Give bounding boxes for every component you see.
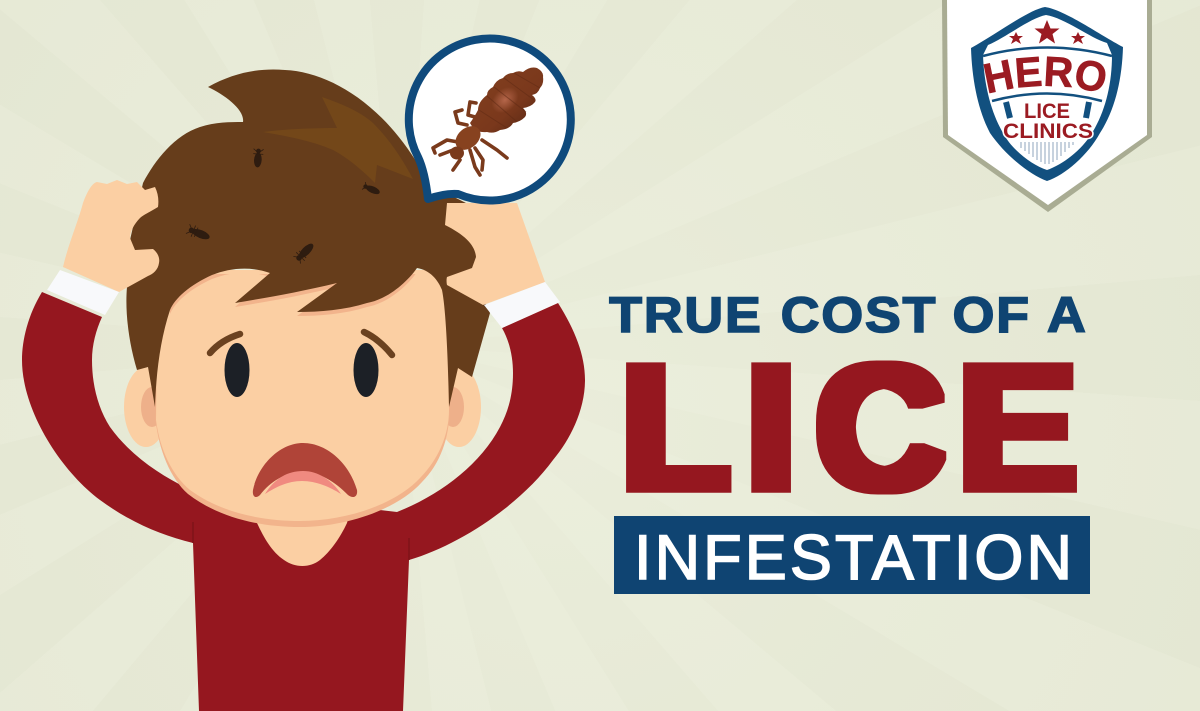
red sweater	[22, 292, 585, 711]
hair	[126, 70, 490, 407]
logo badge	[942, 0, 1152, 212]
infestation banner: INFESTATION	[634, 523, 1072, 593]
hair shadow on forehead	[170, 274, 416, 316]
character: worried boy	[22, 70, 585, 711]
mouth	[253, 443, 357, 497]
heading line: lice: LICE	[621, 328, 1077, 527]
face	[156, 270, 449, 527]
logo wordmark: CLINICS	[1003, 120, 1093, 143]
heading line: true cost of a: A	[1047, 288, 1088, 344]
right cuff	[484, 282, 560, 328]
left eye	[224, 343, 250, 397]
badge plate	[942, 0, 1152, 212]
hair highlight	[263, 97, 413, 183]
left ear	[124, 367, 168, 447]
small lice on hair	[186, 149, 381, 264]
right ear	[437, 367, 481, 447]
shield	[971, 7, 1123, 181]
louse 3	[293, 240, 317, 264]
right eye	[354, 343, 378, 397]
logo wordmark	[984, 56, 1106, 143]
left eyebrow	[210, 334, 240, 353]
louse 2	[186, 223, 211, 243]
logo stripes	[1021, 142, 1073, 164]
heading line: true cost of a: TRUE	[609, 288, 779, 344]
speech bubble with louse	[409, 39, 571, 201]
bubble	[409, 39, 571, 201]
louse 4	[362, 182, 381, 196]
left hand	[63, 180, 159, 292]
stars	[1009, 20, 1085, 44]
right hand	[445, 203, 545, 305]
left cuff	[47, 270, 119, 315]
heading line: true cost of a: OF	[953, 288, 1047, 344]
logo wordmark: HERO	[984, 56, 1106, 94]
arc lines	[983, 48, 1112, 56]
title	[609, 288, 1090, 594]
logo wordmark: LICE	[1024, 100, 1070, 123]
heading line: true cost of a: COST	[781, 288, 954, 344]
icon: louse	[433, 68, 543, 175]
right eyebrow	[364, 332, 392, 355]
neck	[255, 515, 349, 566]
louse 1	[252, 149, 264, 167]
